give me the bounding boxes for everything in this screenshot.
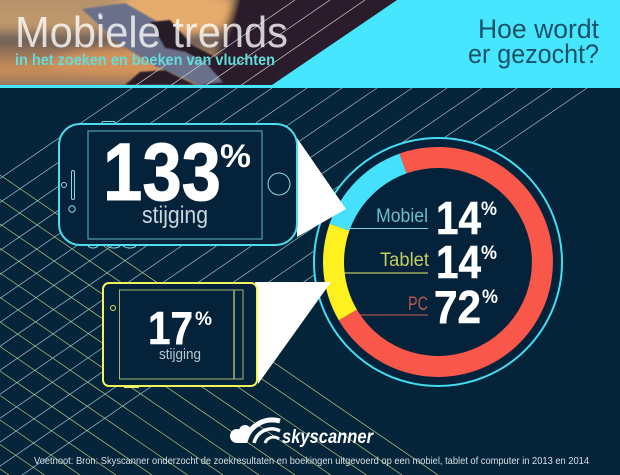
outer ring (314, 138, 562, 386)
legend: tablet: Tablet (380, 250, 430, 271)
legend: pc: PC (408, 294, 428, 315)
legend: tablet: % (481, 243, 497, 264)
tablet percent: % (195, 309, 212, 330)
phone sensor (69, 206, 75, 212)
legend: mobiel: 14 (436, 192, 481, 244)
legend: pc: 72 (434, 281, 481, 333)
tablet body (103, 283, 257, 386)
header cyan panel (0, 0, 620, 88)
icon: cloud (230, 420, 280, 443)
phone speaker (72, 170, 74, 200)
callout: phone beam (297, 138, 346, 237)
tablet caption: stijging (159, 346, 201, 363)
legend: tablet: 14 (436, 236, 481, 288)
legend: mobiel: % (481, 199, 497, 220)
phone number: 133 (103, 127, 221, 218)
tablet camera (110, 306, 116, 310)
legend: pc: % (482, 287, 498, 308)
phone screen (88, 131, 262, 239)
yellow diagonal lines (0, 175, 438, 475)
legend: mobiel: Mobiel (376, 206, 428, 227)
legend: mobiel (350, 192, 497, 244)
phone (59, 122, 297, 248)
section heading: Hoe wordt (478, 14, 599, 44)
segment: tablet (323, 224, 357, 320)
tablet buttons (122, 282, 156, 388)
logo wordmark: skyscanner (282, 427, 374, 448)
phone caption: stijging (142, 202, 208, 229)
tablet screen edge (233, 290, 235, 379)
donut chart (314, 138, 562, 386)
section heading: er gezocht? (468, 39, 599, 69)
legend: tablet (344, 236, 497, 288)
tablet screen (120, 290, 243, 379)
section heading (468, 14, 599, 69)
phone body (59, 124, 297, 245)
skyscanner logo (230, 420, 374, 448)
tablet number: 17 (148, 302, 193, 354)
legend: pc (360, 281, 498, 333)
white diagonal lines (0, 88, 587, 475)
phone home button (268, 173, 290, 195)
subtitle: in het zoeken en boeken van vluchten (15, 52, 275, 69)
header photo (0, 0, 397, 85)
segment: mobile (330, 154, 406, 231)
phone percent: % (220, 138, 251, 174)
title: Mobiele trends (15, 8, 288, 57)
phone buttons (88, 122, 136, 248)
segment: PC (339, 147, 553, 377)
callout: tablet beam (255, 282, 331, 384)
tablet (103, 282, 257, 388)
phone camera (62, 182, 66, 188)
